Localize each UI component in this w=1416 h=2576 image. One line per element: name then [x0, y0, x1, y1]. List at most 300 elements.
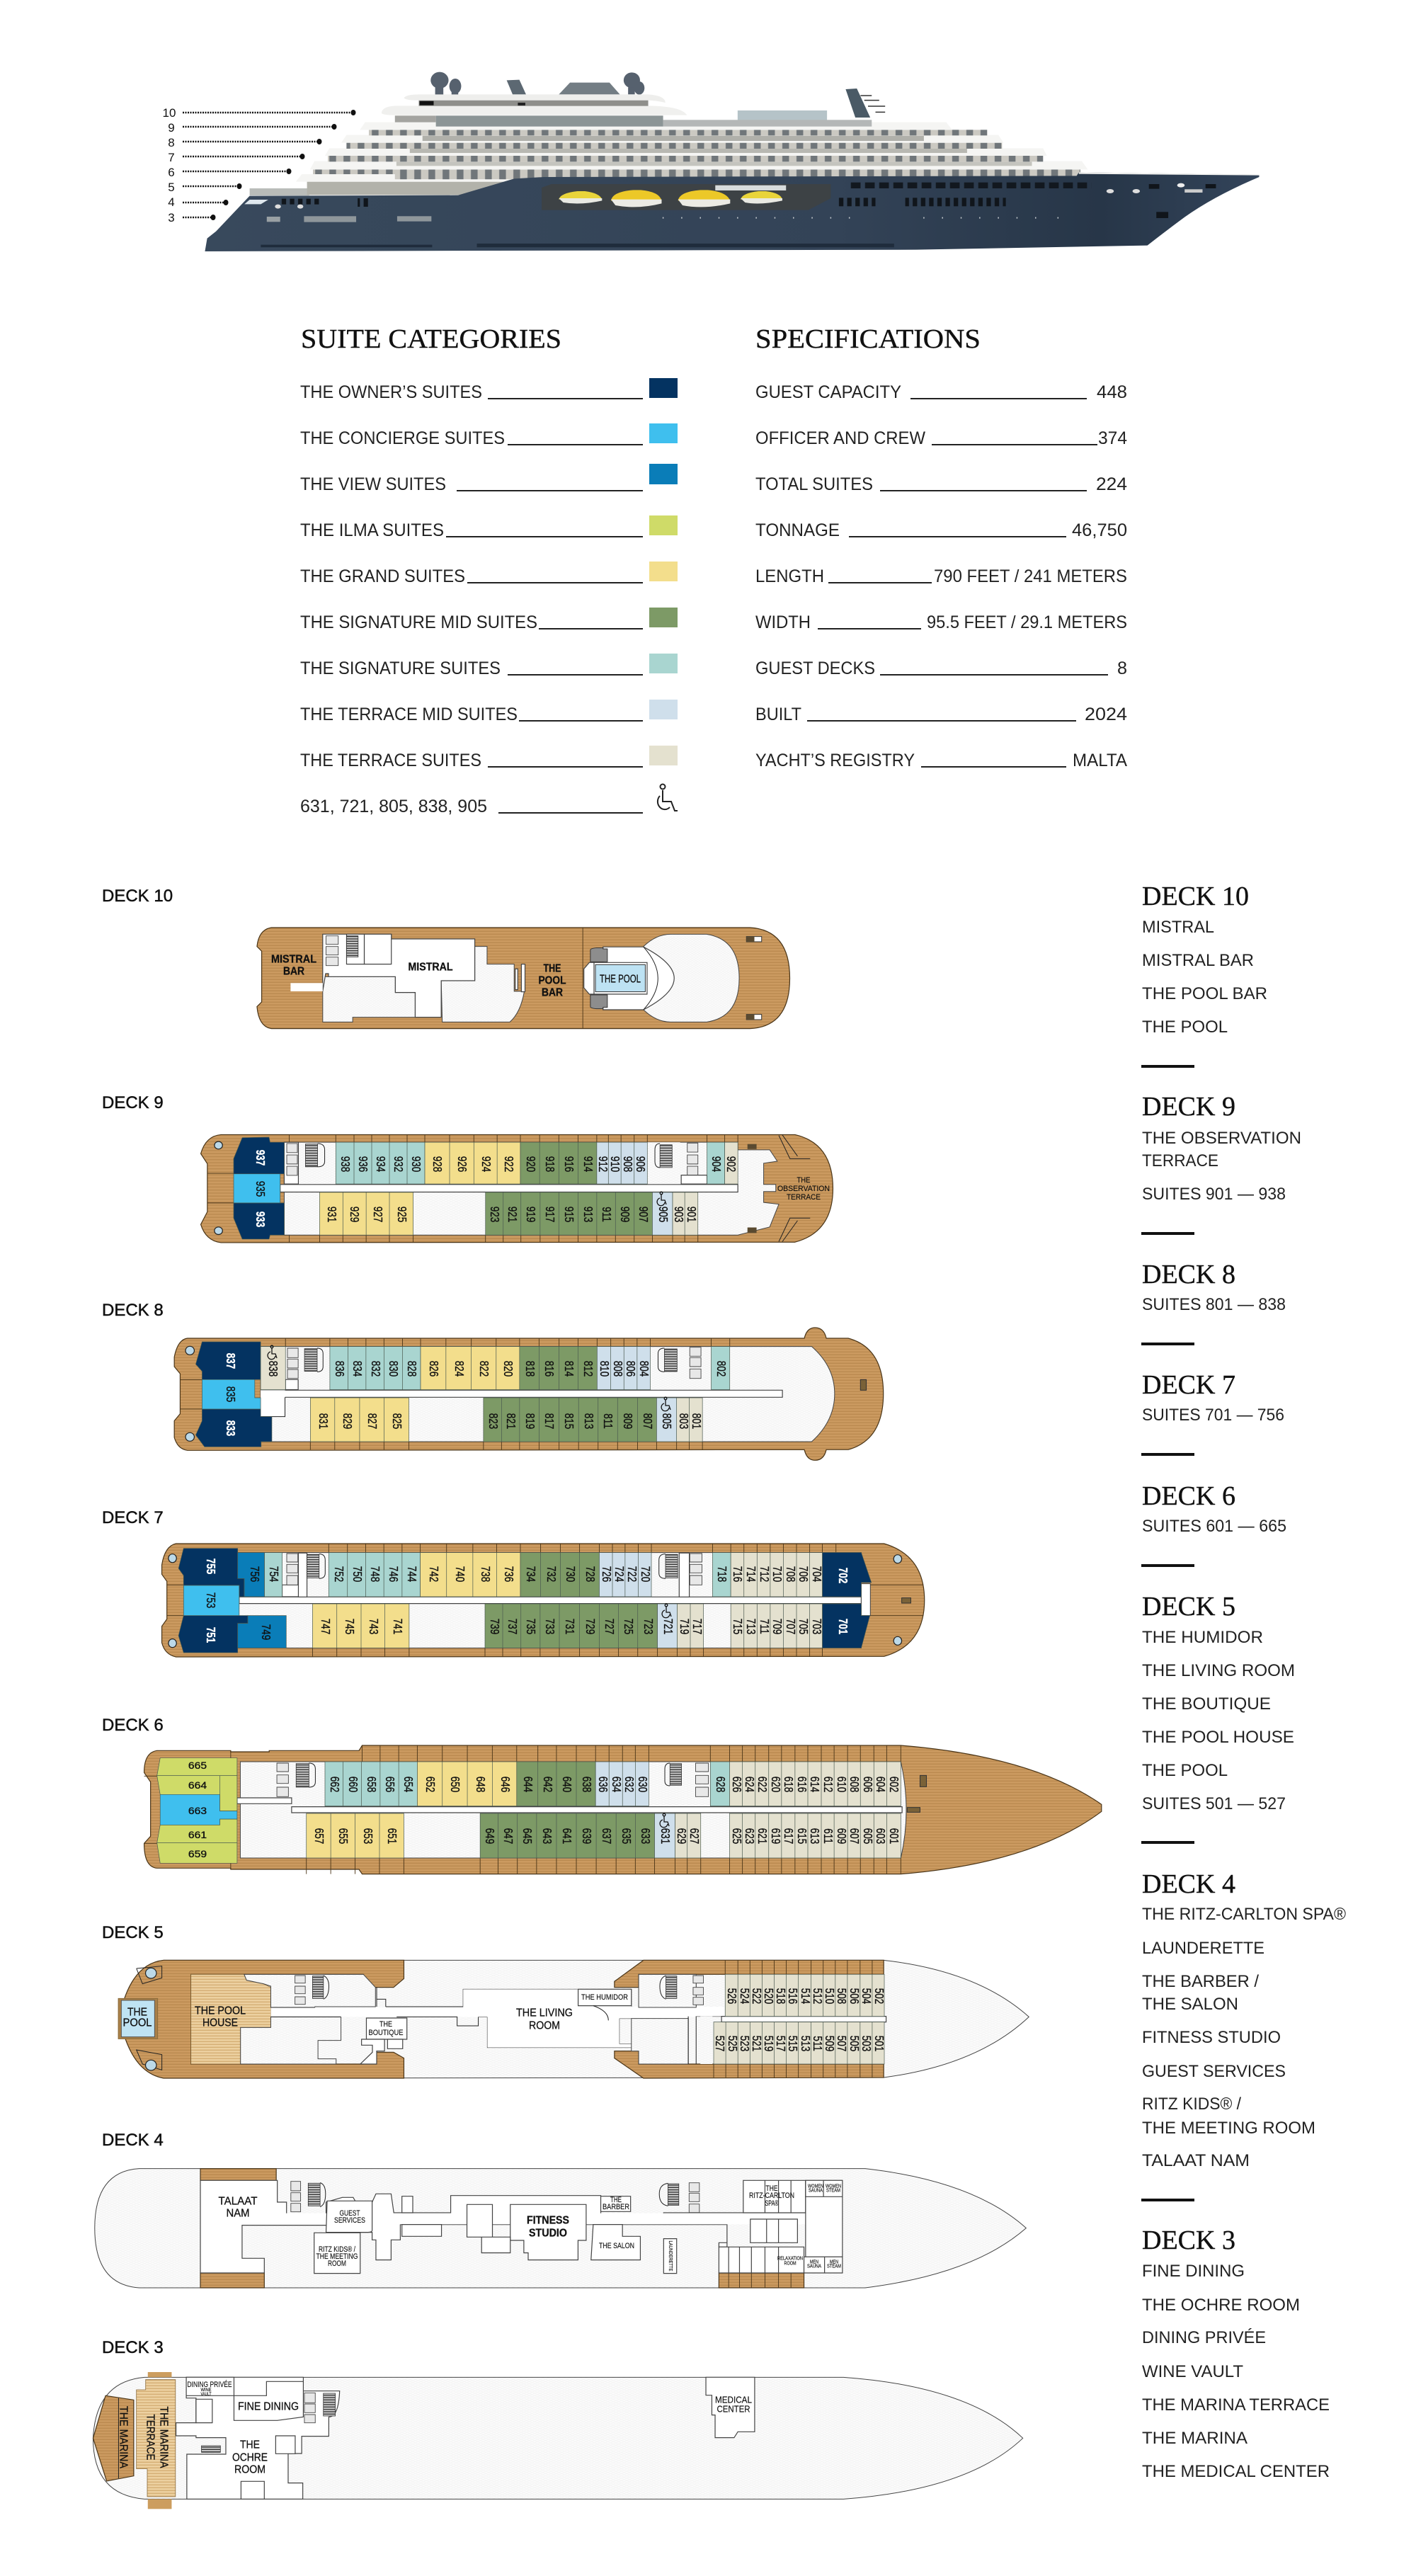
deck fittings	[746, 937, 762, 1020]
deck 10 venue labels: THE POOL	[600, 973, 641, 986]
deck 8 suite numbers: 834	[350, 1361, 364, 1377]
deck 6 suite numbers: 611	[821, 1828, 835, 1844]
legend labels: THE CONCIERGE SUITES	[300, 428, 505, 448]
directory: deck 4: FITNESS STUDIO	[1142, 2028, 1281, 2047]
deck 10 drawing	[257, 928, 790, 1029]
antenna and funnel	[507, 80, 885, 118]
deck 9 suite numbers: 916	[561, 1156, 576, 1172]
directory: deck 8: SUITES 801 — 838	[1142, 1295, 1286, 1314]
deck 7 suite numbers: 750	[350, 1566, 364, 1582]
deck 5 venue labels: ROOM	[529, 2019, 560, 2032]
deck 4 venue labels: SAUNA	[809, 2188, 823, 2194]
deck 8 suite numbers: 810	[597, 1361, 611, 1377]
deck 5 suite numbers: 523	[737, 2036, 751, 2051]
hull	[201, 1134, 833, 1243]
directory: deck 7: SUITES 701 — 756	[1142, 1406, 1284, 1425]
marker numbers: 8	[168, 136, 175, 149]
directory: deck 4: TALAAT NAM	[1142, 2151, 1250, 2170]
deck 7 drawing	[162, 1544, 925, 1657]
deck 9 suite numbers: 902	[724, 1156, 738, 1172]
spec values: 374	[1098, 428, 1127, 448]
deck 10 plan	[257, 928, 790, 1029]
deck 7 suite numbers: 721	[661, 1619, 675, 1634]
deck 8 suite numbers: 828	[404, 1361, 418, 1377]
deck 8 suite numbers: 813	[581, 1413, 595, 1429]
deck 6 suite numbers: 633	[638, 1828, 652, 1844]
deck 4 venue labels: GUEST	[340, 2209, 360, 2218]
deck 9 suite numbers: 903	[671, 1207, 685, 1222]
deck 8 suite numbers: 807	[640, 1413, 654, 1429]
directory: deck 5: THE POOL	[1142, 1761, 1228, 1780]
deck 10 venue labels: THE	[544, 963, 561, 974]
marker numbers: 4	[168, 195, 175, 209]
deck 6 suite numbers: 601	[886, 1828, 901, 1844]
bollards	[215, 1141, 222, 1235]
deck 4 venue labels: TALAAT	[218, 2195, 258, 2208]
deck 9 suite numbers: 937	[253, 1150, 267, 1166]
deck 8 suite numbers: 827	[365, 1413, 379, 1429]
spec values: 2024	[1085, 705, 1127, 724]
directory: deck 6	[1142, 1481, 1286, 1536]
deck 7 suite numbers: 708	[783, 1566, 797, 1582]
spec labels: BUILT	[755, 705, 801, 724]
deck 8 suite numbers: 832	[368, 1361, 382, 1377]
legend labels: THE ILMA SUITES	[300, 520, 444, 540]
directory: deck 3: FINE DINING	[1142, 2262, 1245, 2281]
deck 6 suite numbers: 605	[860, 1828, 874, 1844]
deck 9 suite numbers: 920	[523, 1156, 537, 1172]
deck 9 suite numbers: 908	[620, 1156, 634, 1172]
deck 3 venue labels: WINE	[201, 2388, 211, 2393]
deck 5 suite numbers: 527	[712, 2036, 726, 2051]
panel: suite categories	[300, 324, 678, 816]
deck 6 suite numbers: 629	[674, 1828, 688, 1844]
deck 6 suite numbers: 613	[807, 1828, 821, 1844]
hull	[257, 928, 790, 1029]
deck 4 venue labels: NAM	[227, 2208, 249, 2219]
deck 6 plan	[144, 1745, 1102, 1874]
deck 6 suite numbers: 615	[794, 1828, 809, 1844]
deck 9 suite numbers: 901	[684, 1207, 698, 1222]
deck 4 venue labels: STEAM	[826, 2188, 840, 2194]
deck 5 suite numbers: 502	[872, 1988, 886, 2004]
legend leader lines	[446, 399, 643, 813]
directory: deck 10: THE POOL	[1142, 1018, 1228, 1037]
deck 5 suite numbers	[712, 1988, 886, 2051]
deck 7 suite numbers: 753	[203, 1592, 217, 1608]
deck 9 venue label: THE	[797, 1176, 810, 1185]
deck 7 suite numbers: 701	[835, 1619, 850, 1634]
deck 7 suite numbers: 724	[612, 1566, 626, 1582]
deck 3 venue labels: THE MARINA	[157, 2406, 170, 2468]
deck 9 suite numbers: 906	[633, 1156, 647, 1172]
spec labels: TOTAL SUITES	[755, 474, 873, 494]
suite cells	[714, 1974, 884, 2064]
deck 7 suite numbers: 735	[523, 1619, 537, 1634]
deck 6 suite numbers: 638	[579, 1777, 593, 1792]
deck 3 venue labels: TERRACE	[144, 2415, 156, 2460]
deck 9 suite numbers: 927	[370, 1207, 384, 1222]
deck 4 venue labels: SAUNA	[807, 2264, 821, 2269]
deck 4 plan	[95, 2169, 1026, 2288]
deck 7 suite numbers: 715	[730, 1619, 744, 1634]
deck 7 suite numbers: 746	[386, 1566, 400, 1582]
interior rooms	[176, 2377, 755, 2499]
deck 6 suite numbers	[188, 1760, 901, 1860]
interior	[238, 1553, 870, 1648]
deck 6 suite numbers: 622	[755, 1777, 769, 1792]
hull	[144, 1745, 1102, 1874]
directory: deck 8	[1142, 1260, 1286, 1314]
deck 8 suite numbers: 833	[223, 1420, 237, 1436]
deck 4 venue labels: STEAM	[827, 2264, 841, 2269]
deck 6 suite numbers: 651	[384, 1828, 399, 1844]
deck 6 suite numbers: 652	[423, 1777, 437, 1792]
icon: radar domes	[430, 72, 644, 95]
forward decking	[615, 1960, 884, 2078]
deck 5 suite numbers: 506	[847, 1988, 861, 2004]
deck labels: DECK 9	[102, 1093, 164, 1112]
deck 9 venue label: TERRACE	[787, 1193, 821, 1202]
hull	[93, 2377, 1023, 2499]
deck 3 venue labels: THE MARINA	[118, 2406, 129, 2468]
directory: deck 9: TERRACE	[1142, 1151, 1218, 1170]
marker numbers: 5	[168, 181, 175, 194]
spec leader lines	[807, 399, 1108, 767]
deck 3 venue labels: VAULT	[201, 2393, 212, 2397]
deck 7 suite numbers: 749	[258, 1624, 273, 1640]
deck 10 venue labels: BAR	[283, 966, 304, 977]
deck labels: DECK 4	[102, 2131, 164, 2150]
directory: deck 3: THE OCHRE ROOM	[1142, 2296, 1300, 2315]
deck 7 suite numbers: 712	[757, 1566, 771, 1582]
deck 10 venue labels: MISTRAL	[408, 962, 453, 973]
deck 9 suite numbers: 919	[523, 1207, 537, 1222]
marker numbers: 6	[168, 166, 175, 179]
deck 10 venue labels: MISTRAL	[271, 953, 316, 966]
deck 4 venue labels: THE	[766, 2184, 777, 2193]
deck 7 suite numbers: 732	[544, 1566, 558, 1582]
icon: accessible suite 721	[662, 1604, 671, 1618]
directory: deck 4: THE MEETING ROOM	[1142, 2119, 1315, 2138]
directory: deck 5: SUITES 501 — 527	[1142, 1794, 1286, 1813]
deck 5 suite numbers: 509	[822, 2036, 836, 2051]
deck 9 suite numbers: 909	[617, 1207, 632, 1222]
deck 9 suite numbers: 904	[709, 1156, 723, 1172]
deck 7 suite numbers: 702	[835, 1568, 850, 1583]
legend labels: 631, 721, 805, 838, 905	[300, 797, 487, 816]
deck 8 suite numbers: 802	[714, 1361, 728, 1377]
directory: deck 3: DECK 3	[1142, 2225, 1235, 2255]
deck 6 suite numbers: 642	[540, 1777, 554, 1792]
deck 9 suite numbers: 934	[373, 1156, 387, 1172]
spec values: 224	[1096, 474, 1127, 494]
deck 7 suite numbers: 739	[487, 1619, 501, 1634]
deck 5 venue labels: THE	[127, 2007, 147, 2018]
directory: deck 10: THE POOL BAR	[1142, 984, 1267, 1003]
deck 7 suite numbers: 714	[743, 1566, 758, 1582]
deck 7 suite numbers: 744	[404, 1566, 418, 1582]
marker dots	[211, 110, 355, 220]
legend labels: THE GRAND SUITES	[300, 566, 465, 586]
deck 6 suite numbers: 612	[821, 1777, 835, 1792]
deck 8 plan	[174, 1328, 884, 1460]
deck 5 suite numbers: 511	[810, 2036, 824, 2051]
icons: accessible suites 838 and 805	[268, 1345, 670, 1411]
deck 8 suite numbers: 829	[340, 1413, 354, 1429]
deck 4 venue labels: ROOM	[328, 2259, 346, 2268]
icon: accessible suite 631	[660, 1813, 669, 1828]
deck 6 suite numbers: 643	[539, 1828, 554, 1844]
deck 9 suite numbers: 938	[338, 1156, 352, 1172]
deck 7 suite numbers: 741	[390, 1619, 404, 1634]
deck 5 suite numbers: 517	[773, 2036, 787, 2051]
deck 4 venue labels: SERVICES	[334, 2216, 365, 2225]
deck 9 suite numbers: 918	[542, 1156, 556, 1172]
deck 7 suite numbers: 733	[542, 1619, 556, 1634]
deck 6 suite numbers: 626	[729, 1777, 743, 1792]
deck 8 suite numbers: 806	[623, 1361, 637, 1377]
deck 4 venue labels: STUDIO	[529, 2228, 567, 2239]
deck 7 suite numbers: 751	[203, 1627, 217, 1643]
deck 6 suite numbers: 663	[188, 1806, 207, 1817]
deck 9 suite numbers: 921	[505, 1207, 519, 1222]
decking	[200, 2169, 804, 2288]
deck 3 venue labels: FINE DINING	[238, 2400, 299, 2413]
directory: deck 10: MISTRAL BAR	[1142, 951, 1254, 970]
deck 7 suite numbers: 754	[266, 1566, 280, 1582]
spec labels: YACHT’S REGISTRY	[755, 751, 915, 770]
deck 7 suite numbers: 713	[743, 1619, 758, 1634]
directory: deck 9: SUITES 901 — 938	[1142, 1185, 1286, 1204]
icon: accessible suite 905	[657, 1192, 666, 1206]
bollards	[169, 1554, 902, 1648]
deck 8 suite numbers: 820	[501, 1361, 515, 1377]
deck 9 drawing	[201, 1134, 833, 1243]
directory: deck 4	[1142, 1869, 1346, 2170]
legend labels: THE VIEW SUITES	[300, 474, 446, 494]
deck 9 suite numbers: 914	[581, 1156, 595, 1172]
deck 7 suite numbers: 747	[318, 1619, 332, 1634]
hull	[162, 1544, 925, 1657]
deck 6 suite numbers: 660	[346, 1777, 360, 1792]
deck 7 suite numbers: 748	[367, 1566, 382, 1582]
deck 7 suite numbers: 730	[563, 1566, 577, 1582]
deck 7 suite numbers: 734	[523, 1566, 537, 1582]
deck 8 suite numbers: 803	[676, 1413, 690, 1429]
marker numbers: 7	[168, 151, 175, 164]
heading: specifications: SPECIFICATIONS	[755, 324, 981, 354]
deck 5 venue labels: BOUTIQUE	[368, 2029, 404, 2037]
deck 7 suite numbers: 723	[641, 1619, 655, 1634]
deck 9 suite numbers	[253, 1150, 738, 1227]
deck 9 suite numbers: 931	[324, 1207, 338, 1222]
deck 7 suite numbers: 740	[452, 1566, 467, 1582]
deck 6 suite numbers: 627	[687, 1828, 701, 1844]
interior	[290, 934, 525, 1022]
deck 6 suite numbers: 608	[847, 1777, 861, 1792]
deck 8 suite numbers: 837	[223, 1353, 237, 1369]
deck 5 venue labels: POOL	[123, 2017, 152, 2029]
deck 8 suite numbers: 818	[523, 1361, 537, 1377]
deck 5 suite numbers: 520	[761, 1988, 775, 2004]
directory: deck 4: THE SALON	[1142, 1995, 1238, 2014]
directory: deck 6: DECK 6	[1142, 1481, 1235, 1511]
deck 3 venue labels: ROOM	[234, 2464, 266, 2475]
deck 7 suite numbers: 710	[770, 1566, 784, 1582]
deck 9 suite numbers: 923	[487, 1207, 501, 1222]
spec labels: GUEST CAPACITY	[755, 382, 901, 402]
deck 7 suite numbers: 752	[331, 1566, 346, 1582]
interior rooms	[241, 1974, 886, 2064]
directory: deck 3: THE MARINA	[1142, 2429, 1247, 2448]
deck 5 suite numbers: 513	[798, 2036, 812, 2051]
deck 5 suite numbers: 524	[737, 1988, 751, 2004]
heading: suite categories: SUITE CATEGORIES	[301, 324, 561, 354]
deck 9 suite numbers: 922	[501, 1156, 515, 1172]
deck 8 suite numbers: 826	[426, 1361, 440, 1377]
deck 7 suite numbers: 703	[809, 1619, 823, 1634]
deck 4 venue labels: BARBER	[603, 2203, 629, 2211]
deck 6 suite numbers: 628	[713, 1777, 727, 1792]
deck 4 venue labels: ROOM	[784, 2262, 796, 2266]
deck 6 suite numbers: 607	[847, 1828, 861, 1844]
deck 4 venue labels: RITZ KIDS® /	[319, 2245, 356, 2254]
deck 10 venue labels	[271, 953, 641, 998]
deck 9 suite numbers: 932	[391, 1156, 405, 1172]
hull	[174, 1328, 884, 1460]
deck 6 suite numbers: 646	[498, 1777, 512, 1792]
deck 8 suite numbers: 811	[600, 1413, 615, 1429]
hull	[95, 2169, 1026, 2288]
legend labels: THE SIGNATURE MID SUITES	[300, 612, 537, 632]
deck 7 suite numbers: 743	[366, 1619, 380, 1634]
deck 8 suite numbers	[223, 1353, 728, 1436]
deck 6 suite numbers: 610	[834, 1777, 848, 1792]
deck 5 suite numbers: 514	[798, 1988, 812, 2004]
deck 6 suite numbers: 624	[742, 1777, 756, 1792]
directory: deck 9	[1142, 1092, 1301, 1204]
deck 7 suite numbers: 726	[599, 1566, 613, 1582]
hull	[120, 1960, 1029, 2078]
deck 5 suite numbers: 503	[859, 2036, 873, 2051]
deck 6 suite numbers: 614	[807, 1777, 821, 1792]
deck 6 suite numbers: 647	[501, 1828, 515, 1844]
bollards	[185, 1346, 194, 1441]
deck 8 suite numbers: 814	[561, 1361, 576, 1377]
deck 5 suite numbers: 512	[810, 1988, 824, 2004]
deck 5 suite numbers: 519	[761, 2036, 775, 2051]
deck 6 suite numbers: 649	[482, 1828, 496, 1844]
directory: deck 8: DECK 8	[1142, 1260, 1235, 1289]
deck 3 venue labels: CENTER	[716, 2403, 750, 2415]
deck 6 suite numbers: 603	[873, 1828, 887, 1844]
deck 7 plan	[162, 1544, 925, 1657]
legend swatches	[649, 378, 678, 765]
deck 7 suite numbers: 711	[757, 1619, 771, 1634]
deck 6 drawing	[144, 1745, 1102, 1874]
directory: deck 9: DECK 9	[1142, 1092, 1235, 1122]
directory: deck 5: THE POOL HOUSE	[1142, 1728, 1294, 1747]
deck 4 venue labels: RITZ-CARLTON	[749, 2192, 794, 2200]
deck 7 suite numbers: 719	[677, 1619, 691, 1634]
spec labels: LENGTH	[755, 566, 824, 586]
spec values: 790 FEET / 241 METERS	[934, 566, 1127, 586]
deck 4 venue labels: THE MEETING	[316, 2252, 358, 2261]
suite cells	[234, 1137, 738, 1239]
deck 7 suite numbers: 731	[562, 1619, 576, 1634]
spec labels	[755, 382, 925, 770]
deck 6 suite numbers: 659	[188, 1849, 207, 1860]
deck 6 suite numbers: 645	[520, 1828, 534, 1844]
deck 8 suite numbers: 825	[389, 1413, 404, 1429]
deck 8 suite numbers: 815	[561, 1413, 576, 1429]
superstructure	[250, 94, 1087, 195]
deck 5 drawing	[118, 1960, 1029, 2078]
deck 9 suite numbers: 926	[455, 1156, 469, 1172]
deck 5 suite numbers: 501	[872, 2036, 886, 2051]
deck 4 drawing	[95, 2169, 1026, 2288]
deck 6 suite numbers: 631	[658, 1828, 672, 1844]
deck labels	[102, 887, 173, 2357]
deck 9 suite numbers: 935	[253, 1181, 267, 1197]
deck 8 suite numbers: 816	[542, 1361, 556, 1377]
deck 6 suite numbers: 632	[622, 1777, 636, 1792]
deck 3 venue labels: OCHRE	[232, 2451, 268, 2464]
deck 9 suite numbers: 936	[355, 1156, 370, 1172]
deck 8 suite numbers: 838	[266, 1361, 280, 1377]
deck 6 suite numbers: 656	[382, 1777, 396, 1792]
deck 5 suite numbers: 508	[834, 1988, 848, 2004]
bollards	[137, 1966, 162, 2070]
deck 10 venue labels: BAR	[542, 987, 563, 998]
directory: deck 5: THE BOUTIQUE	[1142, 1694, 1271, 1714]
deck 7 suite numbers: 704	[809, 1566, 823, 1582]
deck 10 venue labels: POOL	[538, 974, 566, 987]
suite cells	[195, 1342, 730, 1447]
deck 6 suite numbers: 621	[755, 1828, 769, 1844]
deck 7 suite numbers: 756	[247, 1566, 261, 1582]
directory: deck 7: DECK 7	[1142, 1370, 1235, 1400]
deck 7 suite numbers: 738	[478, 1566, 492, 1582]
deck 6 suite numbers: 655	[336, 1828, 350, 1844]
deck 7 suite numbers: 727	[602, 1619, 616, 1634]
deck 4 venue labels	[218, 2184, 841, 2272]
deck labels: DECK 6	[102, 1716, 164, 1735]
deck 3 plan	[93, 2372, 1023, 2509]
spec values: 448	[1097, 382, 1127, 402]
deck 9 suite numbers: 915	[561, 1207, 576, 1222]
deck 8 suite numbers: 805	[659, 1413, 673, 1429]
spec values: 95.5 FEET / 29.1 METERS	[927, 612, 1127, 632]
deck 9 suite numbers: 913	[581, 1207, 595, 1222]
deck 7 suite numbers: 718	[714, 1566, 729, 1582]
deck 8 suite numbers: 819	[523, 1413, 537, 1429]
deck 4 venue labels: RELAXATION	[777, 2256, 803, 2262]
deck labels: DECK 8	[102, 1301, 164, 1320]
directory: deck 4: THE BARBER /	[1142, 1972, 1259, 1991]
deck 6 suite numbers: 650	[447, 1777, 462, 1792]
directory: deck 4: DECK 4	[1142, 1869, 1235, 1899]
pool house	[191, 1974, 270, 2064]
directory: deck 4: GUEST SERVICES	[1142, 2062, 1286, 2081]
deck 3 venue labels: DINING PRIVÉE	[187, 2380, 232, 2389]
spec values	[927, 382, 1127, 770]
deck 9 suite numbers: 917	[542, 1207, 556, 1222]
deck fitting	[902, 1598, 910, 1603]
directory: deck 5	[1142, 1592, 1295, 1813]
deck 8 suite numbers: 801	[689, 1413, 703, 1429]
